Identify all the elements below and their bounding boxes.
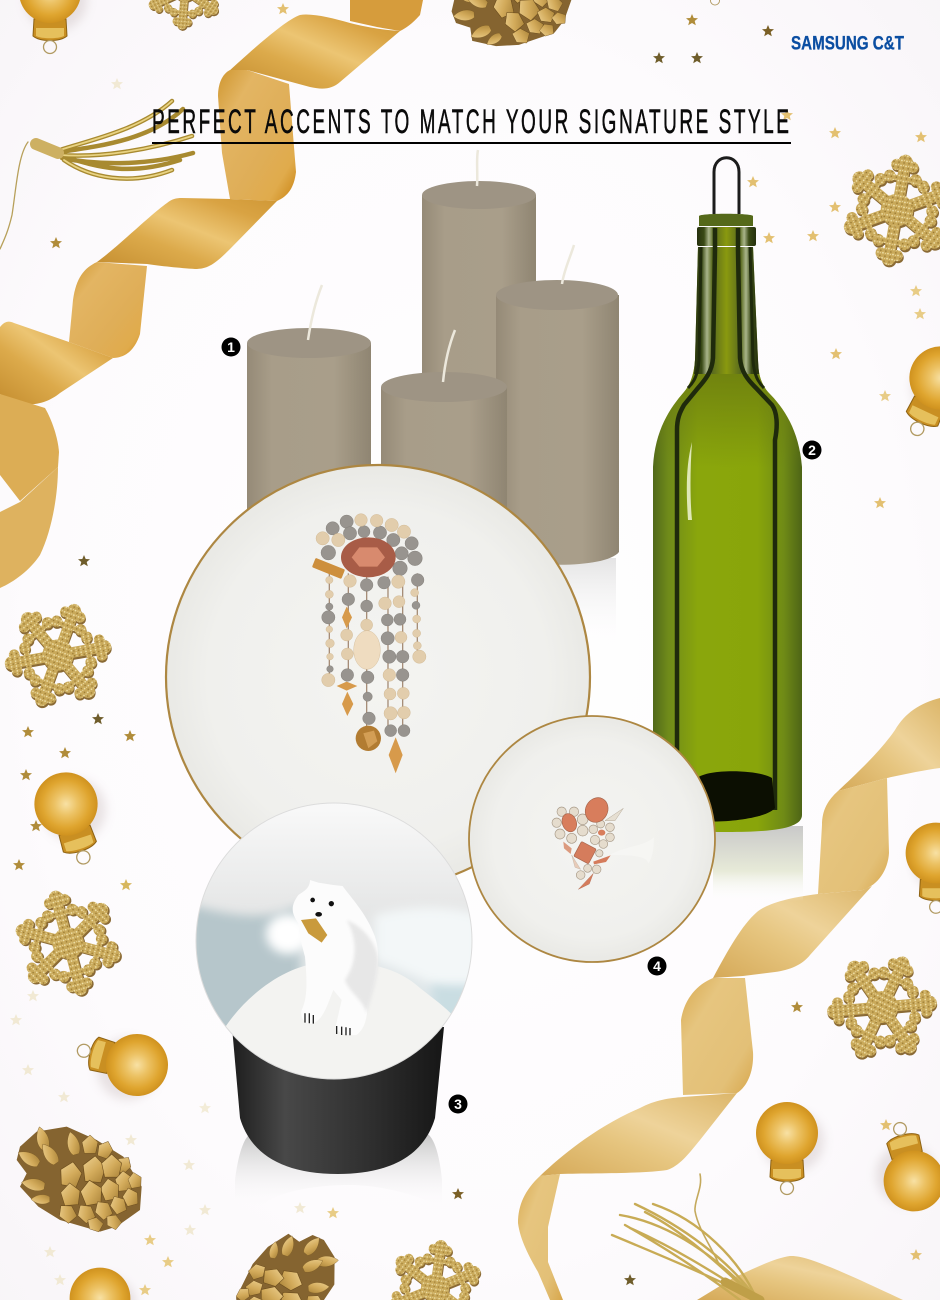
base reflection [235, 1132, 442, 1210]
brooch illustration [312, 514, 426, 773]
item 4: large brooch plate [166, 465, 590, 889]
marker 3 [448, 1094, 468, 1114]
gold tassel top-left [0, 101, 193, 249]
left background snow [196, 903, 304, 1026]
marker 4 [648, 956, 666, 976]
marker 1: 1 [227, 339, 235, 355]
bottle body [653, 247, 802, 832]
small brooch [552, 794, 654, 889]
small plate rim [469, 716, 715, 962]
black base [232, 1027, 444, 1174]
item 2: green glass bottle [653, 158, 803, 901]
tall candle [422, 195, 536, 400]
marker 2 [802, 440, 822, 460]
bottle neck [694, 247, 759, 374]
neck outer lines [688, 247, 764, 388]
marker 2: 2 [808, 442, 816, 458]
globe rim [196, 803, 472, 1079]
marker 4: 4 [653, 958, 661, 974]
right candle [496, 295, 619, 565]
right background snow [374, 908, 472, 986]
candle reflection [548, 558, 616, 648]
top-left gold ribbon [0, 0, 423, 588]
glass highlight [687, 442, 692, 520]
wire loop [714, 158, 739, 214]
bottle reflection [713, 826, 803, 901]
bottle lip [699, 214, 753, 226]
brand logo: SAMSUNG C&T [791, 34, 904, 54]
marker 3: 3 [454, 1096, 462, 1112]
dark glass lines [677, 228, 777, 810]
plate rim [166, 465, 590, 889]
glow [266, 914, 310, 954]
glass sphere [196, 803, 472, 1079]
bottom-right gold ribbon [518, 698, 940, 1300]
marker 1 [222, 338, 240, 356]
polar bear [293, 880, 378, 1035]
gold pine cones [15, 0, 587, 1300]
front candle [381, 387, 507, 520]
snow mound [226, 966, 451, 1078]
right lower snow [430, 981, 466, 1014]
bottle ring [697, 227, 756, 246]
item 4: small brooch plate [469, 716, 715, 962]
shoulder shading [653, 360, 802, 467]
item 3: polar bear snow globe [196, 802, 472, 1180]
dark bottle base [697, 771, 775, 822]
item 1: grey pillar candles [247, 150, 619, 648]
gold tassel bottom-right [612, 1174, 760, 1300]
left candle [247, 343, 371, 520]
title with underline: PERFECT ACCENTS TO MATCH YOUR SIGNATURE STYLE [152, 102, 789, 140]
